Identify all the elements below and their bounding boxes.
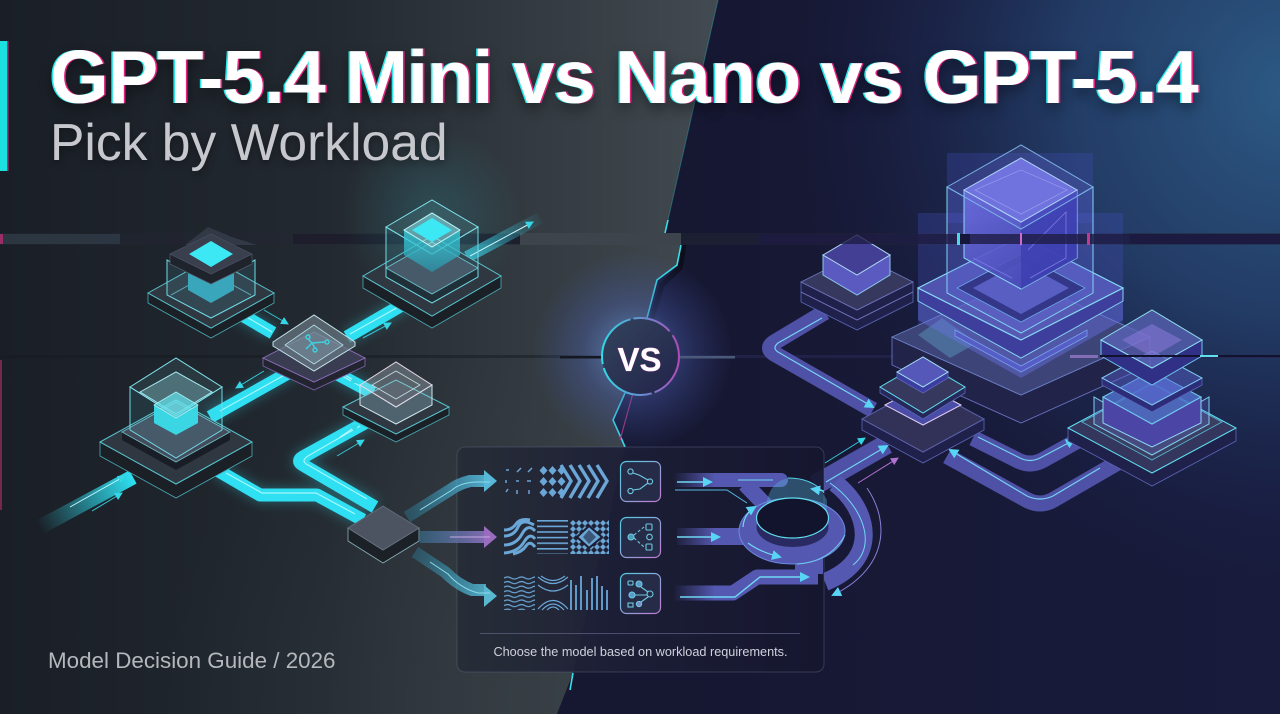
pattern strip: row two [504, 520, 609, 554]
glitch band upper [0, 233, 1280, 245]
node: router block [348, 506, 419, 563]
glow behind top-right node [342, 125, 522, 305]
background: right navy panel [557, 0, 1280, 714]
glitch band lower [0, 355, 1280, 510]
icon box: multi branch [620, 518, 660, 558]
left accent bar [0, 41, 8, 171]
icon: branch glyph [306, 335, 329, 352]
subtitle: Pick by Workload [50, 113, 448, 171]
chart element: ring junction [673, 478, 845, 597]
glitch band overlay [760, 233, 1280, 358]
data beams: left network [40, 218, 540, 527]
node: center tiered stack [862, 357, 984, 463]
node: small right glass stack [343, 362, 449, 442]
node: right glass stack [1068, 310, 1236, 486]
arrow: bottom route [415, 552, 497, 607]
arrow: top route [407, 470, 497, 517]
data pipes: right network [770, 312, 1117, 595]
node: top right stack [363, 200, 501, 328]
title: GPT-5.4 Mini vs Nano vs GPT-5.4 [50, 35, 1198, 119]
footer label: Model Decision Guide / 2026 [48, 648, 336, 673]
node: small cube stack [801, 235, 913, 330]
node: central routing hub [263, 315, 365, 390]
icon box: simple branch [620, 462, 660, 502]
vs glow [532, 252, 732, 452]
node: left large stack [100, 358, 252, 498]
node: big stacked cube [892, 145, 1150, 423]
pattern strip: row three [504, 576, 607, 610]
icon box: dense branch [620, 574, 660, 614]
panel caption: Choose the model based on workload requirements. [493, 645, 788, 659]
pattern strip: row one [506, 465, 607, 498]
background: left dark panel [0, 0, 730, 714]
arrow: middle route [420, 526, 497, 548]
vs badge: VS [617, 341, 662, 378]
node: top left stack [148, 227, 274, 338]
panel: workload selector [457, 447, 824, 672]
chart element: outer ring arc [815, 444, 887, 582]
vs badge [560, 318, 735, 395]
diagonal split edge [570, 220, 684, 690]
